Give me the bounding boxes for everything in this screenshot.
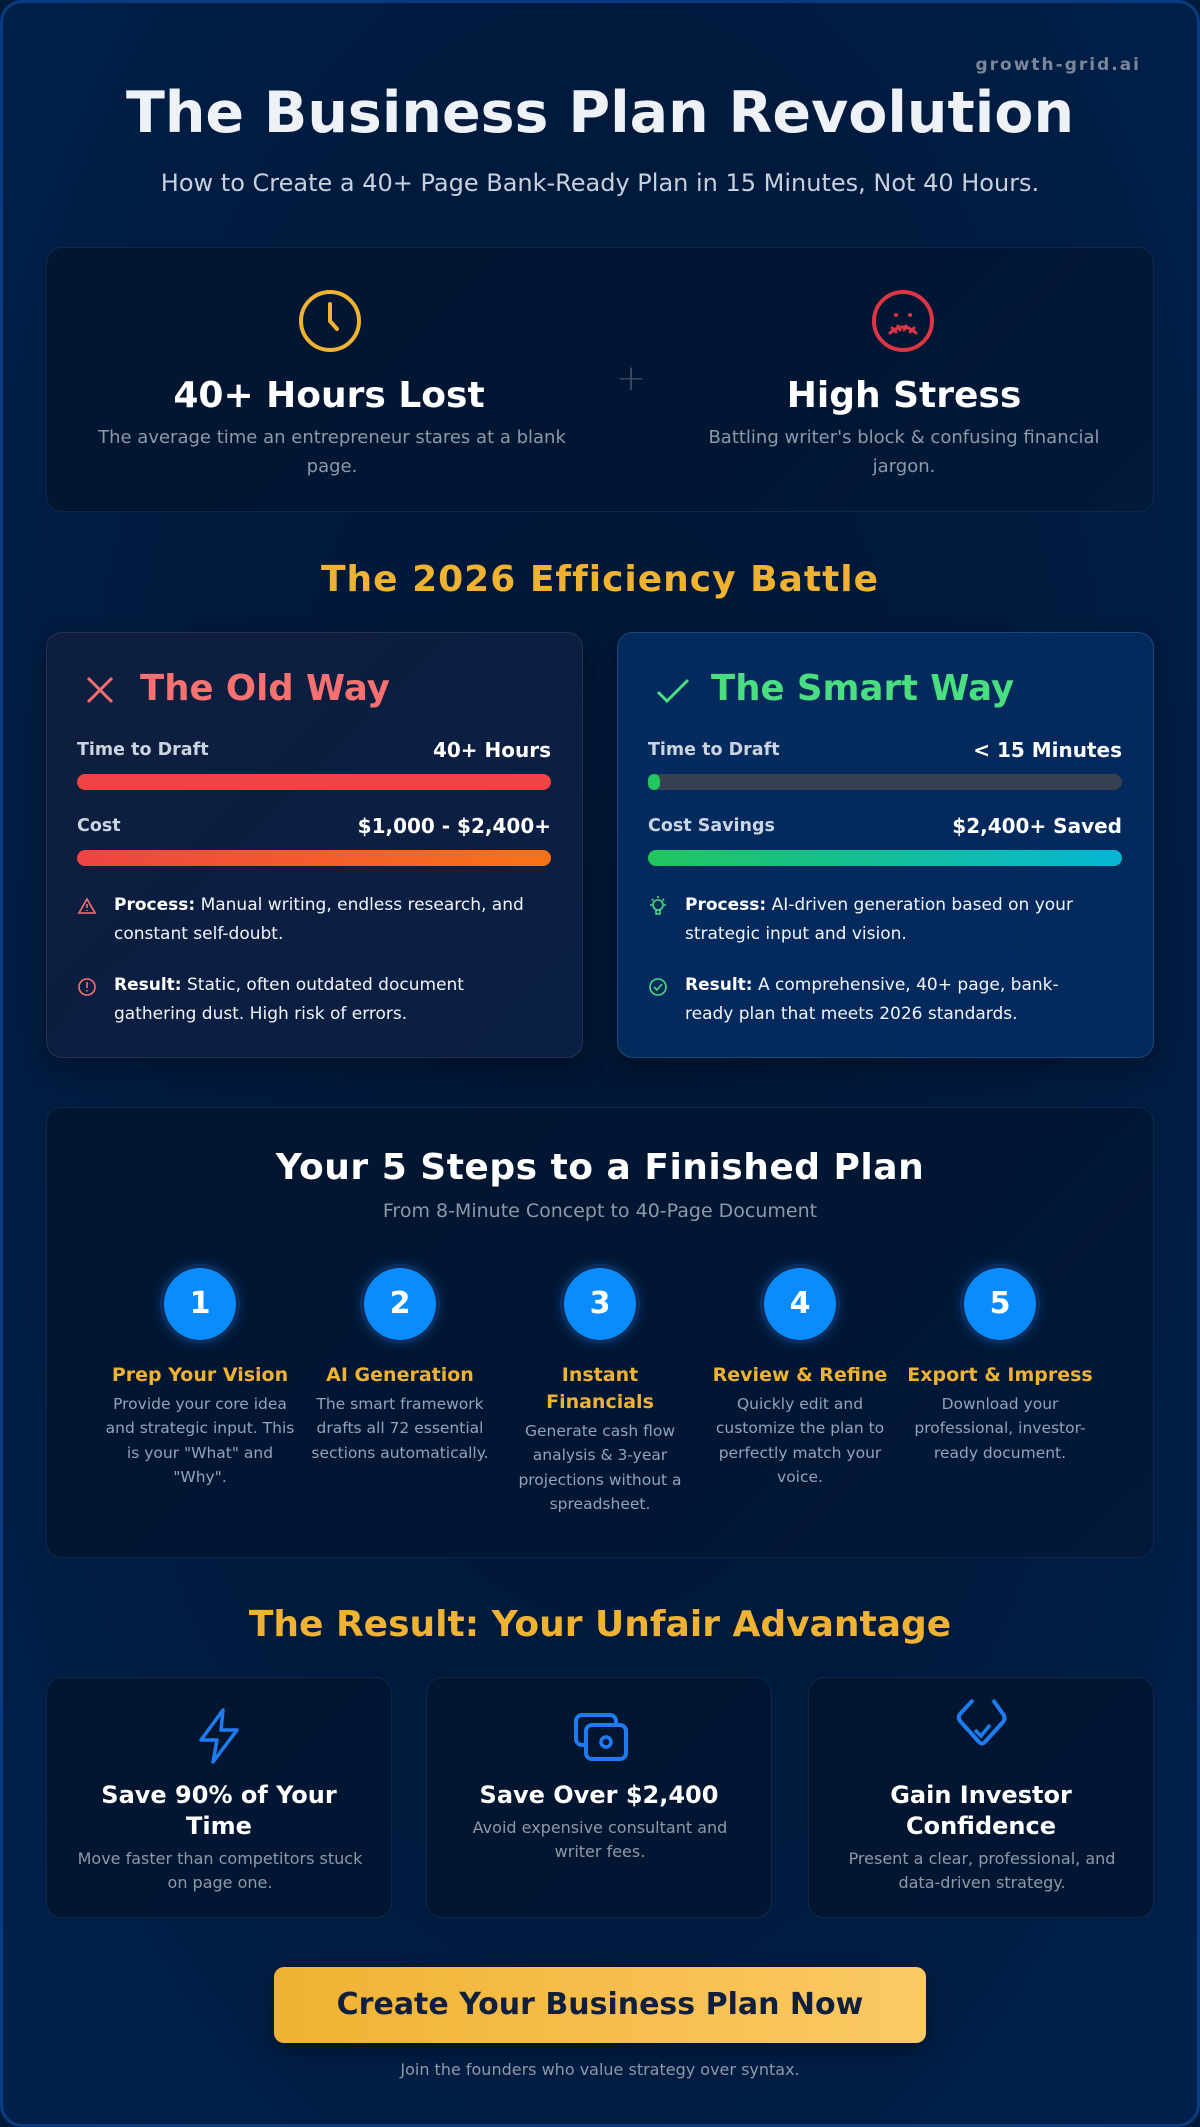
step 1: 1 <box>190 1286 210 1321</box>
step 2: 2 <box>390 1286 410 1321</box>
card: save time: Move faster than competitors stuck on page one. <box>78 1849 362 1892</box>
panel: problems <box>46 247 1154 512</box>
card: investor confidence: Present a clear, professional, and data-driven strategy. <box>849 1849 1115 1892</box>
step 3: 3 <box>590 1286 610 1321</box>
step 5 <box>907 1260 1093 1462</box>
step 2 <box>311 1260 489 1462</box>
card: save time: Save 90% of Your <box>101 1781 337 1809</box>
step 5: 5 <box>990 1286 1010 1321</box>
step 5: Download your professional, investor-ready document. <box>914 1395 1086 1462</box>
heading: 40+ hours lost: 40+ Hours Lost <box>173 375 485 416</box>
card: save money: Avoid expensive consultant and writer fees. <box>473 1818 727 1861</box>
metric: time to draft: Time to Draft <box>77 740 209 760</box>
metric: cost <box>77 814 551 866</box>
icon: x mark <box>87 677 113 703</box>
step 3: Instant Financials <box>546 1364 654 1413</box>
button: CTA: Create Your Business Plan Now <box>337 1987 863 2022</box>
step 4: 4 <box>790 1286 810 1321</box>
metric: smart time to draft <box>648 738 1122 790</box>
heading: the smart way: The Smart Way <box>711 668 1014 709</box>
heading: efficiency battle: The 2026 Efficiency Battle <box>321 559 879 600</box>
icon: plus divider: + <box>616 358 646 399</box>
subheading: steps: From 8-Minute Concept to 40-Page Document <box>383 1200 817 1222</box>
card: save time <box>46 1677 392 1918</box>
metric: cost: Cost <box>77 816 121 836</box>
text: stress description: Battling writer's block & confusing financial jargon. <box>708 427 1100 477</box>
metric: smart time to draft: < 15 Minutes <box>973 738 1122 762</box>
step 1: Prep Your Vision <box>112 1364 288 1386</box>
heading: steps: Your 5 Steps to a Finished Plan <box>276 1147 924 1188</box>
step 4: Quickly edit and customize the plan to perfectly match your voice. <box>716 1395 884 1486</box>
text: hours description: The average time an entrepreneur stares at a blank page. <box>98 427 566 477</box>
metric: cost savings: Cost Savings <box>648 816 775 836</box>
brand label: growth-grid.ai <box>975 55 1141 75</box>
card: save money <box>426 1677 772 1918</box>
text: result: Result: Static, often outdated document gathering dust. High risk of errors. <box>114 975 464 1024</box>
icon: clock <box>299 290 361 352</box>
button: CTA <box>274 1967 926 2043</box>
step 3 <box>518 1260 682 1513</box>
text: smart process: Process: AI-driven generation based on your strategic input and vision. <box>685 895 1073 944</box>
metric: cost savings <box>648 814 1122 866</box>
panel: old way <box>46 632 583 1058</box>
metric: time to draft <box>77 738 551 790</box>
step 1 <box>106 1260 294 1486</box>
step 2: AI Generation <box>326 1364 474 1386</box>
panel: 5 steps <box>46 1107 1154 1558</box>
step 5: Export & Impress <box>907 1364 1093 1386</box>
card: save time: Time <box>186 1812 252 1840</box>
icon: money <box>574 1713 628 1761</box>
heading: result: The Result: Your Unfair Advantage <box>249 1604 951 1645</box>
step 4 <box>713 1260 887 1486</box>
panel: smart way <box>617 632 1154 1058</box>
icon: check mark <box>657 679 689 703</box>
text: process: Process: Manual writing, endless research, and constant self-doubt. <box>114 895 524 944</box>
heading: the old way: The Old Way <box>140 668 390 709</box>
icon: stressed face <box>872 290 934 352</box>
metric: cost: $1,000 - $2,400+ <box>358 814 551 838</box>
card: investor confidence <box>808 1677 1154 1918</box>
card: investor confidence: Gain Investor <box>890 1781 1072 1809</box>
metric: cost savings: $2,400+ Saved <box>952 814 1122 838</box>
metric: time to draft: 40+ Hours <box>433 738 551 762</box>
step 3: Generate cash flow analysis & 3-year projections without a spreadsheet. <box>518 1422 682 1513</box>
step 4: Review & Refine <box>713 1364 887 1386</box>
title: The Business Plan Revolution <box>126 80 1074 146</box>
card: save money: Save Over $2,400 <box>480 1781 718 1809</box>
card: investor confidence: Confidence <box>906 1812 1056 1840</box>
subtitle: How to Create a 40+ Page Bank-Ready Plan in 15 Minutes, Not 40 Hours. <box>161 169 1039 197</box>
icon: badge check <box>956 1698 1007 1746</box>
heading: high stress: High Stress <box>787 375 1021 416</box>
step 2: The smart framework drafts all 72 essential sections automatically. <box>311 1395 489 1462</box>
text: smart result: Result: A comprehensive, 40+ page, bank-ready plan that meets 2026 standards. <box>685 975 1059 1024</box>
footer text: Join the founders who value strategy over syntax. <box>400 2060 800 2079</box>
metric: smart time to draft: Time to Draft <box>648 740 780 760</box>
icon: lightning <box>199 1708 239 1764</box>
step 1: Provide your core idea and strategic input. This is your "What" and "Why". <box>106 1395 294 1486</box>
